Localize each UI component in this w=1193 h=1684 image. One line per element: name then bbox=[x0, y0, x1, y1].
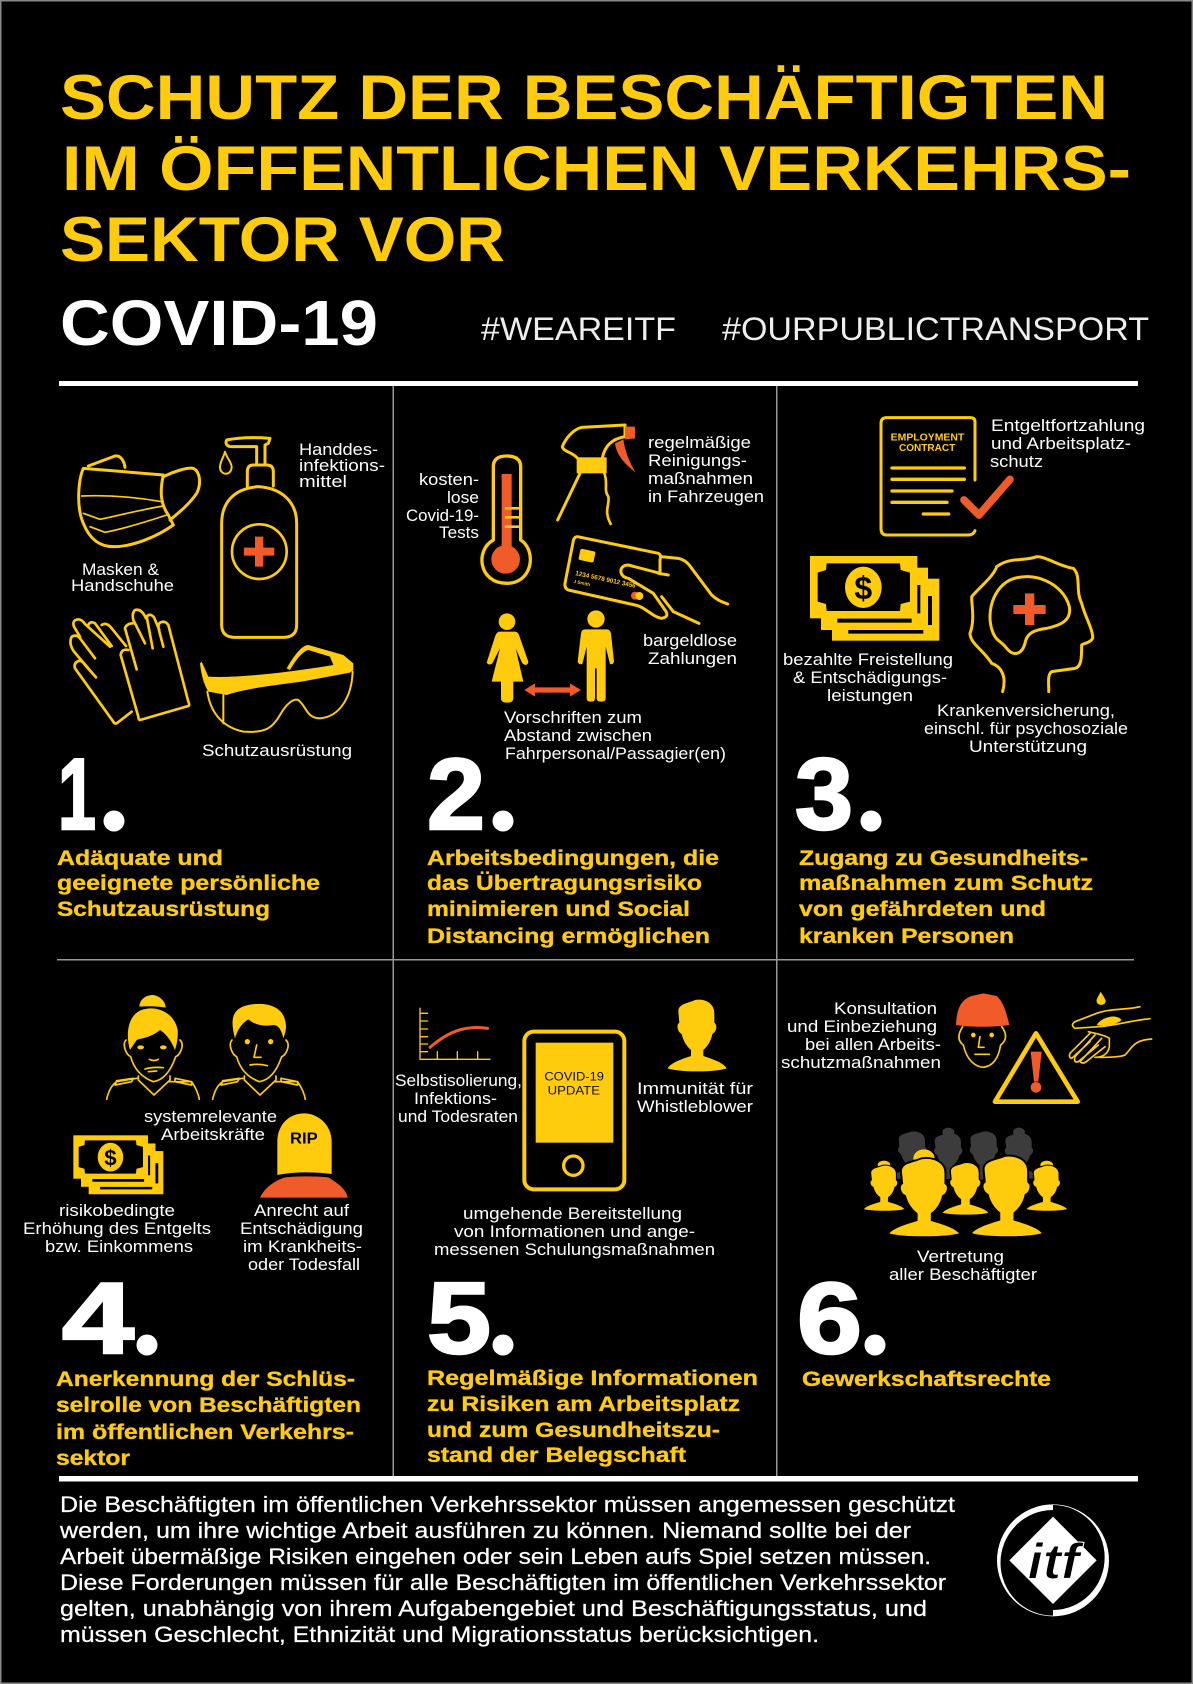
label: free tests: Covid-19- bbox=[406, 506, 479, 525]
label: health insurance bbox=[924, 701, 1128, 756]
label: free tests bbox=[406, 470, 479, 542]
footer text: Die Beschäftigten im öffentlichen Verkehrssektor müssen angemessen geschützt bbox=[60, 1492, 955, 1517]
label: cashless payment: Zahlungen bbox=[648, 649, 737, 668]
label: cleaning bbox=[648, 433, 764, 506]
number 5: 5 bbox=[427, 1263, 491, 1375]
heading 2 bbox=[427, 846, 719, 948]
label: health insurance: Unterstützung bbox=[969, 737, 1087, 756]
label: hazard pay bbox=[23, 1201, 211, 1256]
title: IM ÖFFENTLICHEN VERKEHRS- bbox=[62, 134, 1131, 204]
heading 5: und zum Gesundheitszu- bbox=[427, 1418, 720, 1442]
heading 3: kranken Personen bbox=[799, 924, 1014, 948]
heading 2: Distancing ermöglichen bbox=[427, 924, 710, 948]
label: health insurance: Krankenversicherung, bbox=[937, 701, 1115, 720]
heading 4 bbox=[56, 1367, 361, 1470]
panel 1: protective equipment bbox=[57, 438, 385, 921]
label: key workers: systemrelevante bbox=[144, 1107, 277, 1126]
heading 5: stand der Belegschaft bbox=[427, 1443, 686, 1467]
number 3: 3 bbox=[795, 739, 853, 851]
label: hand sanitizer: mittel bbox=[299, 472, 347, 491]
label: consultation bbox=[781, 999, 941, 1072]
heading 1: Adäquate und bbox=[57, 846, 223, 870]
label: protective gear: Schutzausrüstung bbox=[202, 741, 352, 760]
icon: group of workers bbox=[863, 1128, 1068, 1237]
label: compensation: im Krankheits- bbox=[243, 1237, 362, 1256]
icon: gravestone bbox=[260, 1113, 348, 1198]
label: free tests: Tests bbox=[439, 523, 479, 542]
icon: spray bottle bbox=[558, 425, 636, 524]
label: whistleblower immunity bbox=[637, 1079, 753, 1116]
label: masks and gloves: Masken & bbox=[82, 560, 160, 579]
label: compensation: Entschädigung bbox=[240, 1219, 363, 1238]
label: sick pay: und Arbeitsplatz- bbox=[991, 434, 1131, 453]
label: representation bbox=[889, 1247, 1037, 1284]
icon: employment contract: CONTRACT bbox=[899, 443, 955, 454]
label: distancing rules: Fahrpersonal/Passagier(en) bbox=[505, 744, 726, 763]
icon: card payment: 1234 5678 9012 3456 bbox=[575, 570, 637, 590]
label: paid leave: bezahlte Freistellung bbox=[783, 650, 953, 669]
label: information and training bbox=[434, 1204, 715, 1259]
label: self isolation: Infektions- bbox=[414, 1089, 497, 1108]
icon: phone with update: UPDATE bbox=[548, 1083, 600, 1097]
heading 1: geeignete persönliche bbox=[57, 871, 320, 895]
heading 5: zu Risiken am Arbeitsplatz bbox=[427, 1392, 740, 1416]
heading 4: im öffentlichen Verkehrs- bbox=[56, 1420, 354, 1444]
label: key workers: Arbeitskräfte bbox=[161, 1125, 265, 1144]
label: self isolation bbox=[395, 1071, 522, 1126]
label: free tests: lose bbox=[447, 488, 479, 507]
label: health insurance: einschl. für psychosoziale bbox=[924, 719, 1128, 738]
label: hazard pay: bzw. Einkommens bbox=[45, 1237, 193, 1256]
label: cashless payment bbox=[643, 631, 737, 668]
number 6 bbox=[797, 1263, 886, 1375]
panel 5: information bbox=[395, 1000, 758, 1467]
icon: card payment bbox=[565, 537, 728, 623]
heading 1 bbox=[57, 846, 320, 921]
number 4 bbox=[62, 1263, 158, 1375]
label: representation: Vertretung bbox=[917, 1247, 1004, 1266]
heading 3: Zugang zu Gesundheits- bbox=[799, 846, 1088, 870]
subtitle: COVID-19: COVID-19 bbox=[60, 287, 378, 359]
title bbox=[60, 63, 1131, 275]
number 6: 6 bbox=[797, 1263, 862, 1375]
heading 3: von gefährdeten und bbox=[799, 897, 1046, 921]
label: hazard pay: risikobedingte bbox=[59, 1201, 175, 1220]
icon: gloves bbox=[70, 610, 189, 723]
label: distancing rules bbox=[504, 708, 726, 763]
label: representation: aller Beschäftigter bbox=[889, 1265, 1037, 1284]
icon: male worker bbox=[213, 1004, 305, 1099]
icon: whistleblower silhouette bbox=[668, 1000, 727, 1071]
icon: card payment: J Smith bbox=[573, 579, 591, 587]
logo: ITF: itf bbox=[1028, 1533, 1084, 1589]
icon: money: $ bbox=[104, 1145, 117, 1170]
number 4: 4 bbox=[62, 1263, 134, 1375]
heading 5: Regelmäßige Informationen bbox=[427, 1366, 758, 1390]
label: cleaning: Reinigungs- bbox=[648, 451, 747, 470]
icon: sanitizer bottle bbox=[220, 438, 297, 637]
heading 1: Schutzausrüstung bbox=[57, 897, 270, 921]
label: cashless payment: bargeldlose bbox=[643, 631, 737, 650]
title: SEKTOR VOR bbox=[60, 205, 505, 275]
panel 2: working conditions bbox=[406, 425, 764, 948]
label: information and training: umgehende Bereitstellung bbox=[463, 1204, 682, 1223]
heading 3: maßnahmen zum Schutz bbox=[799, 871, 1093, 895]
icon: worker with hard hat bbox=[956, 993, 1009, 1067]
icon: female worker bbox=[107, 995, 199, 1099]
number 3 bbox=[795, 739, 882, 851]
label: sick pay bbox=[990, 416, 1145, 471]
label: paid leave: leistungen bbox=[827, 686, 913, 705]
label: information and training: messenen Schulungsmaßnahmen bbox=[434, 1240, 715, 1259]
panel 4: key workers bbox=[23, 995, 363, 1470]
label: sick pay: Entgeltfortzahlung bbox=[991, 416, 1145, 435]
icon: infection rate chart bbox=[420, 1008, 490, 1059]
label: cleaning: regelmäßige bbox=[648, 433, 751, 452]
icon: face mask bbox=[79, 456, 200, 547]
heading 3 bbox=[799, 846, 1093, 948]
label: masks and gloves: Handschuhe bbox=[71, 576, 174, 595]
icon: money bbox=[73, 1135, 163, 1194]
icon: employment contract: EMPLOYMENT bbox=[891, 432, 964, 443]
heading 2: minimieren und Social bbox=[427, 897, 690, 921]
hashtag: ourpublictransport: #OURPUBLICTRANSPORT bbox=[722, 311, 1149, 347]
label: consultation: schutzmaßnahmen bbox=[781, 1053, 941, 1072]
label: compensation: Anrecht auf bbox=[254, 1201, 349, 1220]
number 5 bbox=[427, 1263, 514, 1375]
label: whistleblower immunity: Immunität für bbox=[637, 1079, 753, 1098]
label: information and training: von Informationen und ange- bbox=[454, 1222, 695, 1241]
heading 5 bbox=[427, 1366, 758, 1467]
label: hazard pay: Erhöhung des Entgelts bbox=[23, 1219, 211, 1238]
label: paid leave: & Entschädigungs- bbox=[793, 668, 947, 687]
logo: ITF bbox=[997, 1504, 1109, 1616]
hashtag: weareitf: #WEAREITF bbox=[481, 311, 676, 347]
label: distancing rules: Abstand zwischen bbox=[504, 726, 652, 745]
heading 4: selrolle von Beschäftigten bbox=[56, 1393, 361, 1417]
panel 3: health measures bbox=[783, 416, 1145, 948]
icon: thermometer bbox=[482, 456, 530, 583]
heading 4: Anerkennung der Schlüs- bbox=[56, 1367, 355, 1391]
icon: two people with distance arrow bbox=[487, 610, 614, 703]
footer text: gelten, unabhängig von ihrem Aufgabengebiet und Beschäftigungsstatus, und bbox=[60, 1596, 927, 1621]
label: paid leave bbox=[783, 650, 953, 705]
panel 6: union rights bbox=[781, 992, 1152, 1391]
icon: money bbox=[810, 556, 939, 641]
label: consultation: bei allen Arbeits- bbox=[805, 1035, 941, 1054]
label: masks and gloves bbox=[71, 560, 174, 595]
footer text: müssen Geschlecht, Ethnizität und Migrationsstatus berücksichtigen. bbox=[60, 1622, 819, 1647]
footer text: Diese Forderungen müssen für alle Beschäftigten im öffentlichen Verkehrssektor bbox=[60, 1570, 946, 1595]
icon: gravestone: RIP bbox=[290, 1130, 318, 1147]
label: compensation bbox=[240, 1201, 363, 1274]
icon: phone with update: COVID-19 bbox=[544, 1070, 604, 1084]
label: cleaning: in Fahrzeugen bbox=[648, 487, 764, 506]
footer text: werden, um ihre wichtige Arbeit ausführen zu können. Niemand sollte bei der bbox=[59, 1518, 911, 1543]
label: hand sanitizer: infektions- bbox=[299, 456, 385, 475]
heading 6: Gewerkschaftsrechte bbox=[802, 1367, 1051, 1391]
label: consultation: Konsultation bbox=[834, 999, 937, 1018]
number 2 bbox=[427, 739, 514, 851]
icon: employment contract bbox=[881, 418, 1010, 535]
label: consultation: und Einbeziehung bbox=[787, 1017, 937, 1036]
label: compensation: oder Todesfall bbox=[248, 1255, 360, 1274]
icon: money: $ bbox=[854, 570, 872, 606]
label: self isolation: und Todesraten bbox=[398, 1107, 518, 1126]
icon: washing hands bbox=[1069, 992, 1152, 1063]
icon: warning triangle bbox=[995, 1033, 1078, 1102]
footer text: Arbeit übermäßige Risiken eingehen oder sein Leben aufs Spiel setzen müssen. bbox=[60, 1544, 931, 1569]
heading 2: das Übertragungsrisiko bbox=[427, 870, 702, 895]
number 1: 1 bbox=[58, 739, 96, 851]
label: whistleblower immunity: Whistleblower bbox=[637, 1097, 753, 1116]
label: sick pay: schutz bbox=[990, 452, 1043, 471]
number 2: 2 bbox=[427, 739, 485, 851]
title: SCHUTZ DER BESCHÄFTIGTEN bbox=[60, 63, 1108, 133]
label: hand sanitizer: Handdes- bbox=[299, 440, 378, 459]
label: hand sanitizer bbox=[299, 440, 385, 491]
heading 4: sektor bbox=[56, 1446, 131, 1470]
heading 2: Arbeitsbedingungen, die bbox=[427, 846, 719, 870]
footer text bbox=[59, 1492, 955, 1647]
icon: safety goggles bbox=[200, 645, 353, 732]
label: self isolation: Selbstisolierung, bbox=[395, 1071, 522, 1090]
label: cleaning: maßnahmen bbox=[648, 469, 753, 488]
label: free tests: kosten- bbox=[419, 470, 479, 489]
label: distancing rules: Vorschriften zum bbox=[504, 708, 642, 727]
icon: phone with update bbox=[524, 1032, 624, 1189]
icon: head with brain and cross bbox=[970, 557, 1093, 692]
label: key workers bbox=[144, 1107, 277, 1144]
